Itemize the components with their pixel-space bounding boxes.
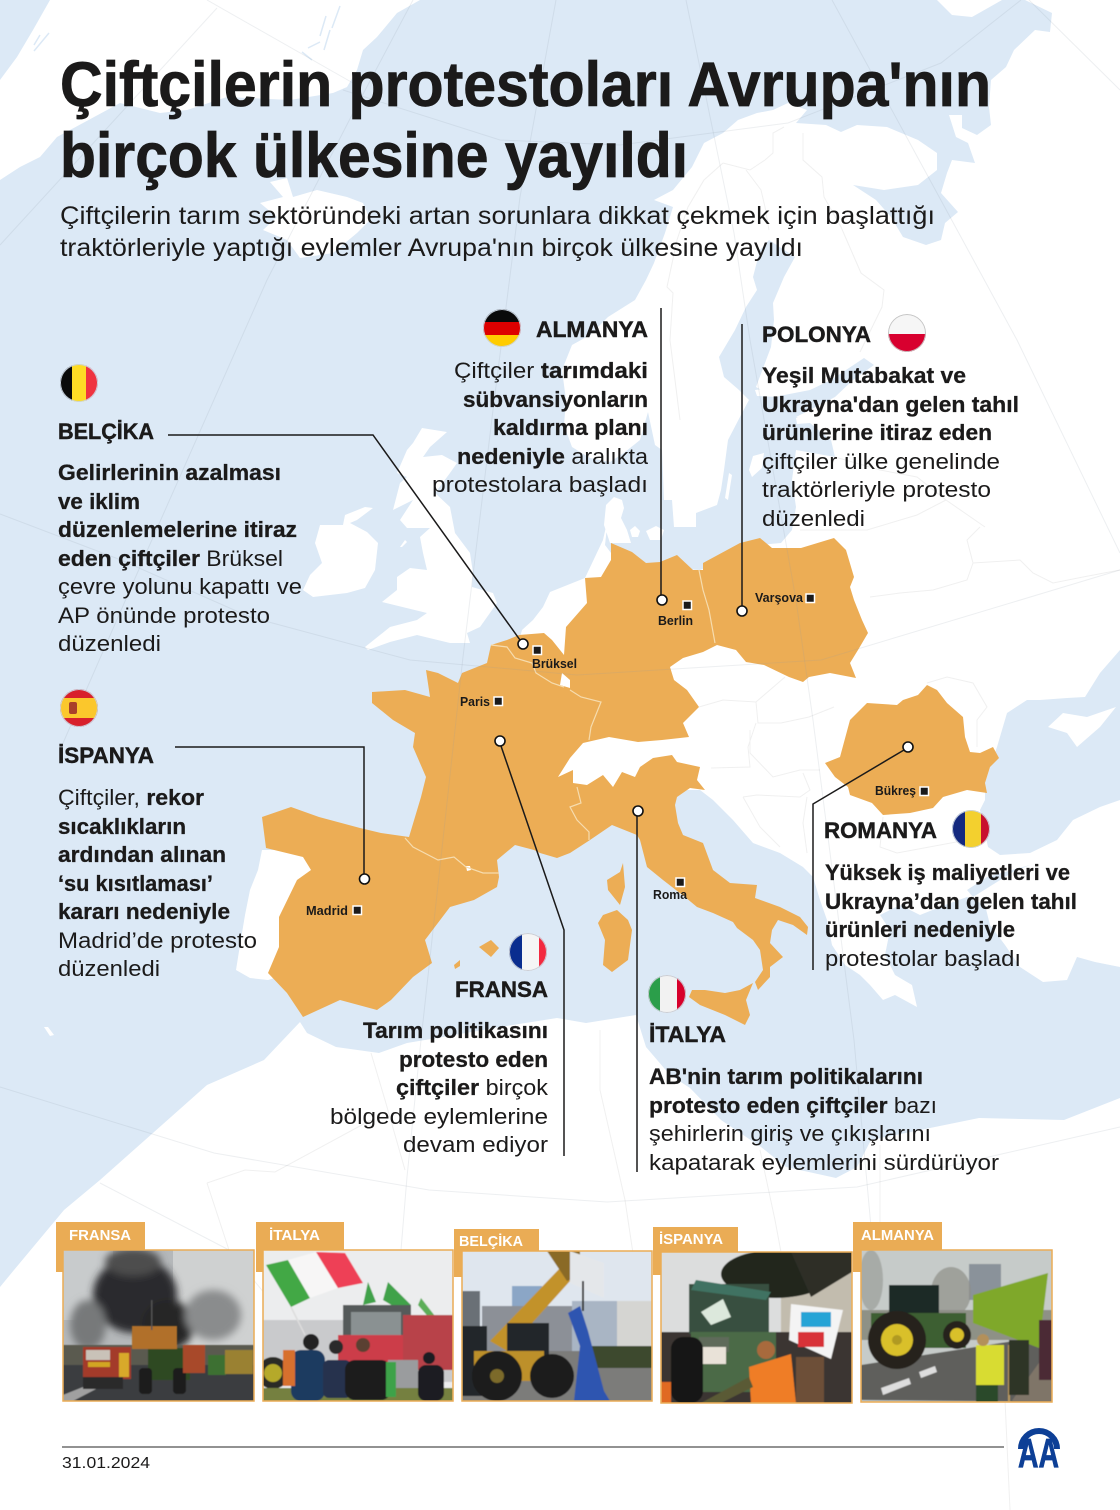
text block: İtalya: şehirlerin giriş ve çıkışlarını (649, 1121, 931, 1146)
panel: İtalya (637, 816, 1000, 1175)
photo: İtalya: İTALYA (269, 1227, 320, 1244)
text block: Polonya: ürünlerine itiraz eden (762, 420, 992, 445)
icon: AA agency logo (1018, 1430, 1059, 1476)
photo: İtalya (256, 1222, 453, 1401)
text block: İtalya: protesto eden çiftçiler bazı (649, 1093, 937, 1118)
map markers and capital labels: Varşova (755, 591, 804, 605)
subtitle: Çiftçilerin tarım sektöründeki artan sorunlara dikkat çekmek için başlattığı (60, 202, 935, 230)
photo: İspanya (653, 1227, 852, 1403)
photo: İspanya: İSPANYA (659, 1231, 723, 1248)
text block: Polonya: traktörleriyle protesto (762, 477, 991, 502)
map markers and capital labels: Brüksel (532, 657, 577, 671)
panel: Belçika (58, 364, 520, 656)
heading: İspanya: İSPANYA (58, 743, 154, 768)
text block: Almanya: nedeniyle aralıkta (457, 444, 648, 469)
text block: Polonya: Yeşil Mutabakat ve (762, 363, 966, 388)
text block: Fransa: Tarım politikasını (363, 1018, 548, 1043)
title: birçok ülkesine yayıldı (60, 121, 688, 191)
text block: Fransa: çiftçiler birçok (396, 1075, 549, 1100)
text block: Polonya (762, 363, 1019, 531)
map markers and capital labels: Roma (653, 888, 688, 902)
photo: Almanya (853, 1222, 1052, 1402)
text block: Belçika: çevre yolunu kapattı ve (58, 574, 302, 599)
text block: Almanya: sübvansiyonların (463, 387, 648, 412)
map markers and capital labels: Madrid (306, 904, 348, 918)
text block: Romanya: Ukrayna’dan gelen tahıl (825, 889, 1077, 914)
text block: Belçika: AP önünde protesto (58, 603, 270, 628)
map markers and capital labels: Berlin (658, 614, 693, 628)
text block: Romanya: ürünleri nedeniyle (825, 917, 1015, 942)
leader line: İspanya (175, 747, 364, 874)
heading: Belçika: BELÇİKA (58, 419, 154, 444)
heading: Romanya: ROMANYA (824, 818, 937, 843)
photo: Belçika (454, 1229, 652, 1401)
text block: İtalya: kapatarak eylemlerini sürdürüyor (649, 1150, 1000, 1175)
photo: Fransa (56, 1222, 254, 1401)
text block: Almanya (432, 358, 648, 497)
text block: İspanya: Çiftçiler, rekor (58, 785, 204, 810)
leader line: İtalya (636, 816, 638, 1172)
leader line: Romanya (813, 750, 904, 970)
text block: İspanya: sıcaklıkların (58, 814, 186, 839)
panel: Fransa (330, 746, 564, 1157)
icon: flag of Germany (483, 309, 521, 347)
text block: Polonya: çiftçiler ülke genelinde (762, 449, 1000, 474)
panel: Romanya (813, 750, 1077, 971)
footer rule (62, 1446, 1004, 1448)
text block: Polonya: Ukrayna'dan gelen tahıl (762, 392, 1019, 417)
subtitle: traktörleriyle yaptığı eylemler Avrupa'nın birçok ülkesine yayıldı (60, 234, 803, 262)
text block: Polonya: düzenledi (762, 506, 865, 531)
map markers and capital labels: Bükreş (875, 784, 916, 798)
text block: İspanya: ardından alınan (58, 842, 226, 867)
heading: İtalya: İTALYA (649, 1022, 726, 1047)
text block: Belçika: düzenledi (58, 631, 161, 656)
leader line: Polonya (741, 324, 743, 606)
text block: İspanya (58, 785, 257, 981)
photo: Almanya: ALMANYA (861, 1227, 934, 1244)
text block: Almanya: kaldırma planı (493, 415, 648, 440)
icon: flag of Poland (888, 314, 926, 353)
panel: Almanya (432, 308, 661, 595)
heading: Polonya: POLONYA (762, 322, 871, 347)
text block: İspanya: Madrid’de protesto (58, 928, 257, 953)
text block: Belçika (58, 460, 302, 656)
text block: İtalya (649, 1064, 1000, 1175)
text block: İspanya: ‘su kısıtlaması’ (58, 871, 213, 896)
text block: Fransa (330, 1018, 549, 1157)
text block: Almanya: protestolara başladı (432, 472, 648, 497)
text block: Belçika: ve iklim (58, 489, 140, 514)
icon: flag of Italy (648, 975, 686, 1013)
icon: flag of Belgium (60, 364, 98, 402)
title: Çiftçilerin protestoları Avrupa'nın (60, 50, 991, 120)
text block: İspanya: kararı nedeniyle (58, 899, 230, 924)
leader line: Almanya (660, 308, 662, 595)
leader line: Fransa (501, 746, 564, 1156)
photo: Fransa: FRANSA (69, 1227, 131, 1244)
protest countries in orange (262, 538, 999, 1025)
text block: Fransa: devam ediyor (403, 1132, 549, 1157)
icon: flag of Spain (60, 689, 98, 727)
leader line: Belçika (168, 435, 520, 640)
text block: İtalya: AB'nin tarım politikalarını (649, 1064, 923, 1089)
Baltic, Marmara and Black Sea drawn over land (34, 6, 1120, 897)
map markers and capital labels: Paris (460, 695, 490, 709)
text block: Belçika: düzenlemelerine itiraz (58, 517, 297, 542)
text block: Belçika: eden çiftçiler Brüksel (58, 546, 283, 571)
text block: İspanya: düzenledi (58, 956, 160, 981)
text block: Belçika: Gelirlerinin azalması (58, 460, 281, 485)
heading: Fransa: FRANSA (455, 977, 548, 1002)
text block: Romanya: protestolar başladı (825, 946, 1021, 971)
panel: İspanya (58, 689, 364, 981)
title (60, 50, 991, 191)
photo: Belçika: BELÇİKA (459, 1233, 523, 1250)
text block: Fransa: bölgede eylemlerine (330, 1104, 548, 1129)
text block: Romanya (825, 860, 1077, 971)
text block: Romanya: Yüksek iş maliyetleri ve (825, 860, 1070, 885)
heading: Almanya: ALMANYA (536, 317, 648, 342)
panel: Polonya (742, 314, 1019, 606)
text block: Almanya: Çiftçiler tarımdaki (454, 358, 648, 383)
icon: AA agency logo: AA (1018, 1430, 1059, 1476)
icon: flag of Romania (952, 810, 990, 848)
date: 31.01.2024 (62, 1455, 150, 1472)
icon: flag of France (509, 933, 548, 971)
map markers and capital labels (306, 591, 928, 918)
text block: Fransa: protesto eden (399, 1047, 548, 1072)
subtitle (60, 202, 935, 262)
